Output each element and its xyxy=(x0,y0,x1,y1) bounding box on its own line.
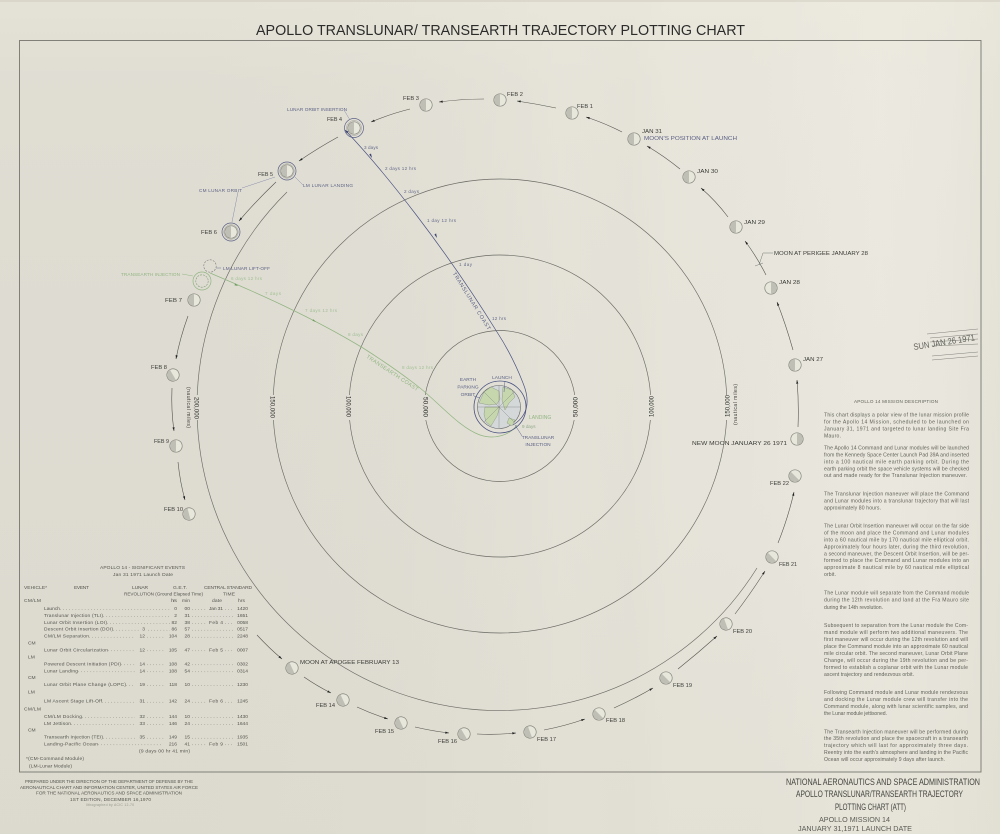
table central standard time column: 1245 xyxy=(237,699,248,705)
ring labels xyxy=(185,384,739,428)
preparation credits: AERONAUTICAL CHART AND INFORMATION CENTER, UNITED STATES AIR FORCE xyxy=(20,785,198,790)
mission description body text: place the Command module into an approximate 60 nautical xyxy=(824,644,968,650)
table central standard time column: 1935 xyxy=(237,735,248,741)
mission description body text: during the 14th revolution. xyxy=(824,605,883,611)
table elapsed minutes column: 31 xyxy=(185,613,190,619)
moon date labels: FEB 19 xyxy=(673,683,692,689)
mission description body text: first maneuver will occur during the 12th revolution and will xyxy=(824,637,968,643)
table central standard time column: 0517 xyxy=(237,627,248,633)
table vehicle labels: LM xyxy=(28,654,35,660)
callout: moon at perigee xyxy=(755,251,869,266)
table elapsed hours column: 104 xyxy=(169,634,177,640)
table elapsed minutes column: 47 xyxy=(185,647,190,653)
mission description body text: approximately 80 hours. xyxy=(824,505,881,511)
table central standard time column: 1230 xyxy=(237,682,248,688)
preparation credits: FOR THE NATIONAL AERONAUTICS AND SPACE ADMINISTRATION xyxy=(36,790,182,796)
moon date labels: JAN 27 xyxy=(803,357,823,363)
event labels around the moon: LUNAR ORBIT INSERTION xyxy=(287,107,347,112)
publisher block xyxy=(786,776,980,833)
table elapsed minutes column: 10 xyxy=(185,714,190,720)
panel: significant events table xyxy=(24,565,252,769)
table elapsed hours column: 142 xyxy=(169,699,177,705)
table vehicle labels: CM xyxy=(28,641,36,647)
table date column: Feb 9 xyxy=(209,741,223,747)
ring labels: 200,000 xyxy=(193,397,200,419)
table event names: Transearth Injection (TEI) xyxy=(44,735,103,741)
moon date labels: FEB 21 xyxy=(779,562,797,568)
table lunar revolution column: 33 xyxy=(140,721,145,727)
translunar coast trajectory xyxy=(345,130,527,425)
earth labels: PARKING xyxy=(457,384,479,390)
title: APOLLO TRANSLUNAR/ TRANSEARTH TRAJECTORY PLOTTING CHART xyxy=(256,22,745,39)
mission description body text: Mauro. xyxy=(824,434,841,440)
mission description body text: of the moon and place the Command and Lunar modules xyxy=(824,530,969,536)
event labels around the moon: LM LUNAR LIFT-OFF xyxy=(223,266,270,271)
mission description body text: This chart displays a polar view of the lunar mission profile xyxy=(824,412,969,418)
mission description body text: Approximately four hours later, during the third revolution, xyxy=(824,544,969,550)
mission description body text: ascent trajectory and rendezvous orbit. xyxy=(824,672,914,678)
table event names: Translunar Injection (TLI) xyxy=(44,613,103,619)
ring labels: 150,000 xyxy=(724,395,731,417)
table lunar revolution column: 19 xyxy=(140,682,145,688)
mission description body text: approximate 8 nautical mile by 60 nautical mile elliptical xyxy=(824,565,969,571)
table vehicle labels: CM xyxy=(28,727,36,733)
publisher block: PLOTTING CHART (ATT) xyxy=(835,801,906,812)
mission description body text: for the Apollo 14 Mission, scheduled to be launched on xyxy=(824,420,969,426)
table lunar revolution column: 12 xyxy=(140,634,145,640)
mission description body text: Reentry into the earth's atmosphere and landing in the Pacific xyxy=(824,750,968,756)
mission description body text: from the Kennedy Space Center Launch Pad 39A and inserted xyxy=(824,452,969,458)
table central standard time column: 0007 xyxy=(237,647,248,653)
table elapsed minutes column: 38 xyxy=(185,620,190,626)
table title: APOLLO 14 - SIGNIFICANT EVENTS xyxy=(100,565,186,571)
mission description body text: The Transearth Injection maneuver will be performed during xyxy=(824,729,968,735)
moon date labels: FEB 10 xyxy=(164,507,184,513)
event labels around the moon: CM LUNAR ORBIT xyxy=(199,188,242,193)
table event names: Lunar Orbit Plane Change (LOPC) xyxy=(44,682,126,688)
table event names: Descent Orbit Insertion (DOI) xyxy=(44,627,113,633)
mission description body text: Subsequent to separation from the Lunar module the Com- xyxy=(824,623,968,629)
leader dots xyxy=(60,610,234,745)
table elapsed minutes column: 24 xyxy=(185,699,190,705)
table elapsed hours column: 149 xyxy=(169,735,177,741)
table elapsed minutes column: 57 xyxy=(185,627,190,633)
earth labels: LAUNCH xyxy=(492,375,512,381)
table elapsed hours column: 86 xyxy=(172,627,177,633)
panel: mission description xyxy=(824,399,970,763)
moon date labels: MOON AT APOGEE FEBRUARY 13 xyxy=(300,660,400,666)
table header xyxy=(24,585,252,604)
table vehicle labels xyxy=(24,641,41,733)
table central standard time column: 1420 xyxy=(237,606,248,612)
mission description body text: Following Command module and Lunar module rendezvous xyxy=(824,690,968,696)
moon date labels: FEB 18 xyxy=(606,718,626,724)
table elapsed hours column: 0 xyxy=(174,606,177,612)
mission description body text: The Lunar module will separate from the Command module xyxy=(824,591,969,597)
table central standard time column: 2248 xyxy=(237,634,248,640)
earth labels: ORBIT xyxy=(461,392,475,398)
mission description body text: during the 12th revolution and land at the Fra Mauro site xyxy=(824,598,969,604)
table footnotes: (LM-Lunar Module) xyxy=(29,763,72,769)
table event names: Launch xyxy=(44,606,60,612)
table central standard time column: 0302 xyxy=(237,661,248,667)
table event names: LM Jettison xyxy=(44,721,71,727)
table elapsed hours column: 118 xyxy=(169,682,177,688)
mission description body text: the Lunar module jettisoned. xyxy=(824,711,887,717)
mission description body text: The Lunar Orbit Insertion maneuver will occur on the far side xyxy=(824,524,969,530)
event labels around the moon: TRANSEARTH INJECTION xyxy=(121,272,180,277)
table title xyxy=(100,565,186,578)
table header: EVENT xyxy=(74,585,89,591)
table elapsed hours column: 146 xyxy=(169,721,177,727)
mission description body text: Command module, along with lunar scientific samples, and xyxy=(824,704,968,710)
table elapsed minutes column: 24 xyxy=(185,721,190,727)
ring labels: 150,000 xyxy=(269,396,276,418)
transearth coast trajectory xyxy=(210,273,517,437)
table event names: CM/LM Docking xyxy=(44,714,82,720)
transearth coast trajectory: 6 days 12 hrs xyxy=(231,276,263,281)
moon date labels: FEB 20 xyxy=(733,629,753,635)
moon date labels: FEB 17 xyxy=(537,737,556,743)
mission description body text: out and made ready for the Translunar Injection maneuver. xyxy=(824,473,967,479)
table elapsed hours column xyxy=(169,606,177,747)
table date column: Feb 6 xyxy=(209,699,223,705)
earth labels: EARTH xyxy=(460,377,477,383)
mission description body text: and Lunar modules into a translunar trajectory that will last xyxy=(824,498,970,504)
transearth coast trajectory: 7 days xyxy=(265,291,282,296)
mission description body text: into a 60 nautical mile by 170 nautical mile elliptical orbit. xyxy=(824,537,969,543)
table elapsed hours column: 108 xyxy=(169,661,177,667)
table elapsed hours column: 82 xyxy=(172,620,177,626)
table central standard time column: 1430 xyxy=(237,714,248,720)
moon date labels: FEB 9 xyxy=(154,439,169,445)
mission description body text: into a 100 nautical mile earth parking orbit. During the xyxy=(824,459,969,465)
translunar coast trajectory: 3 days xyxy=(364,145,379,150)
moon date labels: JAN 31 xyxy=(642,129,662,135)
moon date labels: JAN 28 xyxy=(779,280,801,286)
table elapsed minutes column xyxy=(185,606,190,747)
translunar coast trajectory: 2 days 12 hrs xyxy=(385,166,417,171)
ring labels: (nautical miles) xyxy=(185,387,191,428)
earth labels xyxy=(457,375,555,448)
table elapsed hours column: 105 xyxy=(169,647,177,653)
moon date labels: FEB 8 xyxy=(151,365,168,371)
table event names xyxy=(44,606,126,747)
transearth coast trajectory: 8 days xyxy=(348,332,364,337)
table header: hrs xyxy=(238,598,246,604)
table central standard time column: 0058 xyxy=(237,620,248,626)
preparation credits: 1ST EDITION, DECEMBER 16,1970 xyxy=(70,797,151,802)
mission description body text: The Translunar Injection maneuver will place the Command xyxy=(824,491,969,497)
table event names: Lunar Orbit Insertion (LOI) xyxy=(44,620,107,626)
event labels around the moon xyxy=(121,107,353,277)
ring labels: 50,000 xyxy=(572,397,579,417)
table footnotes: (9 days 00 hr 41 min) xyxy=(139,749,190,755)
moon date labels: FEB 5 xyxy=(258,172,274,178)
mission description body text: mand module will perform two additional maneuvers. The xyxy=(824,630,968,636)
mission description body text: January 31, 1971 and targeted to lunar landing Site Fra xyxy=(824,426,969,432)
table lunar revolution column: 3 xyxy=(142,627,145,633)
table vehicle labels: CM/LM xyxy=(24,707,41,713)
mission description body text: formed to establish a coplanar orbit with the Lunar module xyxy=(824,665,968,671)
table header: CM/LM xyxy=(24,598,41,604)
mission description heading: APOLLO 14 MISSION DESCRIPTION xyxy=(854,399,938,404)
table lunar revolution column: 12 xyxy=(140,647,145,653)
earth labels: 9 days xyxy=(522,424,536,429)
table elapsed hours column: 216 xyxy=(169,741,177,747)
table title: Jan 31 1971 Launch Date xyxy=(113,572,173,578)
table lunar revolution column: 14 xyxy=(140,661,145,667)
table header: VEHICLE* xyxy=(24,585,47,591)
ring labels: 50,000 xyxy=(422,397,429,417)
preparation credits xyxy=(20,779,198,807)
table lunar revolution column: 31 xyxy=(140,699,145,705)
table elapsed hours column: 2 xyxy=(174,613,177,619)
table central standard time column: 1501 xyxy=(237,741,248,747)
mission description body text xyxy=(824,412,970,763)
table elapsed minutes column: 00 xyxy=(185,606,190,612)
table header: G.E.T. xyxy=(173,585,187,591)
moon date labels: NEW MOON JANUARY 26 1971 xyxy=(692,441,787,447)
table event names: Lunar Orbit Circularization xyxy=(44,647,108,653)
moon date labels: JAN 29 xyxy=(744,220,765,226)
callout: moon at perigee: MOON AT PERIGEE JANUARY 28 xyxy=(774,251,869,257)
polar range rings xyxy=(197,179,757,710)
table date column: Jan 31 xyxy=(209,606,223,612)
sun direction stamp xyxy=(913,329,978,360)
ring labels: 100,000 xyxy=(648,396,655,417)
mission description body text: trajectory which will last for approximately three days. xyxy=(824,743,968,749)
table header: date xyxy=(212,598,222,604)
table lunar revolution column xyxy=(140,627,145,741)
ring labels: 100,000 xyxy=(345,396,352,417)
ring labels: (nautical miles) xyxy=(733,384,739,425)
mission description body text: and docking the Lunar module crew will transfer into the xyxy=(824,697,968,703)
translunar coast trajectory: 2 days xyxy=(404,189,420,194)
table event names: Landing-Pacific Ocean xyxy=(44,741,98,747)
table central standard time column: 1651 xyxy=(237,613,248,619)
lunar orbit rings and mission event callouts xyxy=(182,110,364,290)
translunar coast trajectory: 12 hrs xyxy=(492,316,507,321)
table event names: Powered Descent Initiation (PDI) xyxy=(44,661,121,667)
table date column xyxy=(209,606,223,747)
earth labels: INJECTION xyxy=(525,442,551,448)
transearth coast trajectory: 8 days 12 hrs xyxy=(402,365,434,370)
moon date labels: FEB 2 xyxy=(507,92,523,98)
moon date labels: FEB 4 xyxy=(327,117,343,123)
table event names: CM/LM Separation xyxy=(44,634,89,640)
table footnotes xyxy=(26,749,190,769)
moon positions xyxy=(165,94,804,742)
publisher block: JANUARY 31,1971 LAUNCH DATE xyxy=(798,826,912,833)
moon date labels: FEB 15 xyxy=(375,729,395,735)
moon date labels: FEB 14 xyxy=(316,703,336,709)
table header: min xyxy=(182,598,190,604)
moon date labels xyxy=(151,92,823,745)
table elapsed minutes column: 42 xyxy=(185,661,190,667)
table elapsed minutes column: 28 xyxy=(185,634,190,640)
earth labels: LANDING xyxy=(529,415,551,421)
mission description body text: a second maneuver, the Descent Orbit Insertion, will be per- xyxy=(824,551,969,557)
mission description body text: Change, will occur during the 19th revolution and be per- xyxy=(824,658,968,664)
table date column: Feb 4 xyxy=(209,620,223,626)
table elapsed minutes column: 15 xyxy=(185,735,190,741)
table elapsed minutes column: 10 xyxy=(185,682,190,688)
moon date labels: FEB 22 xyxy=(770,481,789,487)
table elapsed minutes column: 54 xyxy=(185,668,190,674)
moon date labels: FEB 7 xyxy=(165,298,182,304)
publisher block: APOLLO MISSION 14 xyxy=(819,817,890,824)
preparation credits: lithographed by ACIC 12-70 xyxy=(86,803,134,807)
table header: LUNAR xyxy=(132,585,148,591)
table footnotes: *(CM-Command Module) xyxy=(26,756,84,762)
mission description body text: the 35th revolution and place the spacecraft in a transearth xyxy=(824,736,968,742)
earth labels: TRANSLUNAR xyxy=(522,435,555,441)
table event names: LM Ascent Stage Lift-Off xyxy=(44,699,103,705)
table lunar revolution column: 32 xyxy=(140,714,145,720)
mission description body text: formed to place the Command and Lunar modules into an xyxy=(824,558,969,564)
table header: TIME xyxy=(223,592,236,598)
table central standard time column xyxy=(237,606,248,747)
translunar coast trajectory: TRANSLUNAR COAST xyxy=(451,271,492,332)
table date column: Feb 5 xyxy=(209,647,223,653)
mission description body text: orbit. xyxy=(824,572,836,578)
moon date labels: FEB 1 xyxy=(577,104,593,110)
event labels around the moon: LM LUNAR LANDING xyxy=(303,183,353,188)
transearth coast trajectory: TRANSEARTH COAST xyxy=(365,354,420,393)
transearth coast trajectory: 7 days 12 hrs xyxy=(305,308,338,313)
moon date labels: FEB 3 xyxy=(403,96,420,102)
table elapsed hours column: 144 xyxy=(169,714,177,720)
sun direction stamp: SUN JAN 26 1971 xyxy=(913,332,976,352)
moon date labels: FEB 16 xyxy=(438,739,458,745)
table header: CENTRAL STANDARD xyxy=(204,585,252,591)
table vehicle labels: CM xyxy=(28,675,36,681)
mission description body text: earth parking orbit the space vehicle systems will be checked xyxy=(824,466,969,472)
preparation credits: PREPARED UNDER THE DIRECTION OF THE DEPARTMENT OF DEFENSE BY THE xyxy=(25,779,193,784)
table event names: Lunar Landing xyxy=(44,668,78,674)
moon date labels: JAN 30 xyxy=(697,169,719,175)
earth with parking orbit xyxy=(474,381,526,433)
mission description body text: mile circular orbit. The second maneuver, Lunar Orbit Plane xyxy=(824,651,968,657)
mission description body text: The Apollo 14 Command and Lunar modules will be launched xyxy=(824,445,969,451)
translunar coast trajectory: 1 day xyxy=(459,262,473,267)
moon date labels: FEB 6 xyxy=(201,230,218,236)
table elapsed minutes column: 41 xyxy=(185,741,190,747)
continents xyxy=(479,387,515,426)
moon track arrows xyxy=(172,99,798,734)
table elapsed hours column: 108 xyxy=(169,668,177,674)
table lunar revolution column: 35 xyxy=(140,735,145,741)
translunar coast trajectory: 1 day 12 hrs xyxy=(427,218,457,223)
table lunar revolution column: 14 xyxy=(140,668,145,674)
table central standard time column: 0314 xyxy=(237,668,248,674)
callout: moon's position at launch: MOON'S POSITION AT LAUNCH xyxy=(644,136,737,142)
table vehicle labels: LM xyxy=(28,690,35,696)
table header: hrs xyxy=(171,598,178,604)
mission description body text: Ocean will occur approximately 9 days after launch. xyxy=(824,757,945,763)
table central standard time column: 1644 xyxy=(237,721,248,727)
table header: REVOLUTION (Ground Elapsed Time) xyxy=(124,592,203,596)
